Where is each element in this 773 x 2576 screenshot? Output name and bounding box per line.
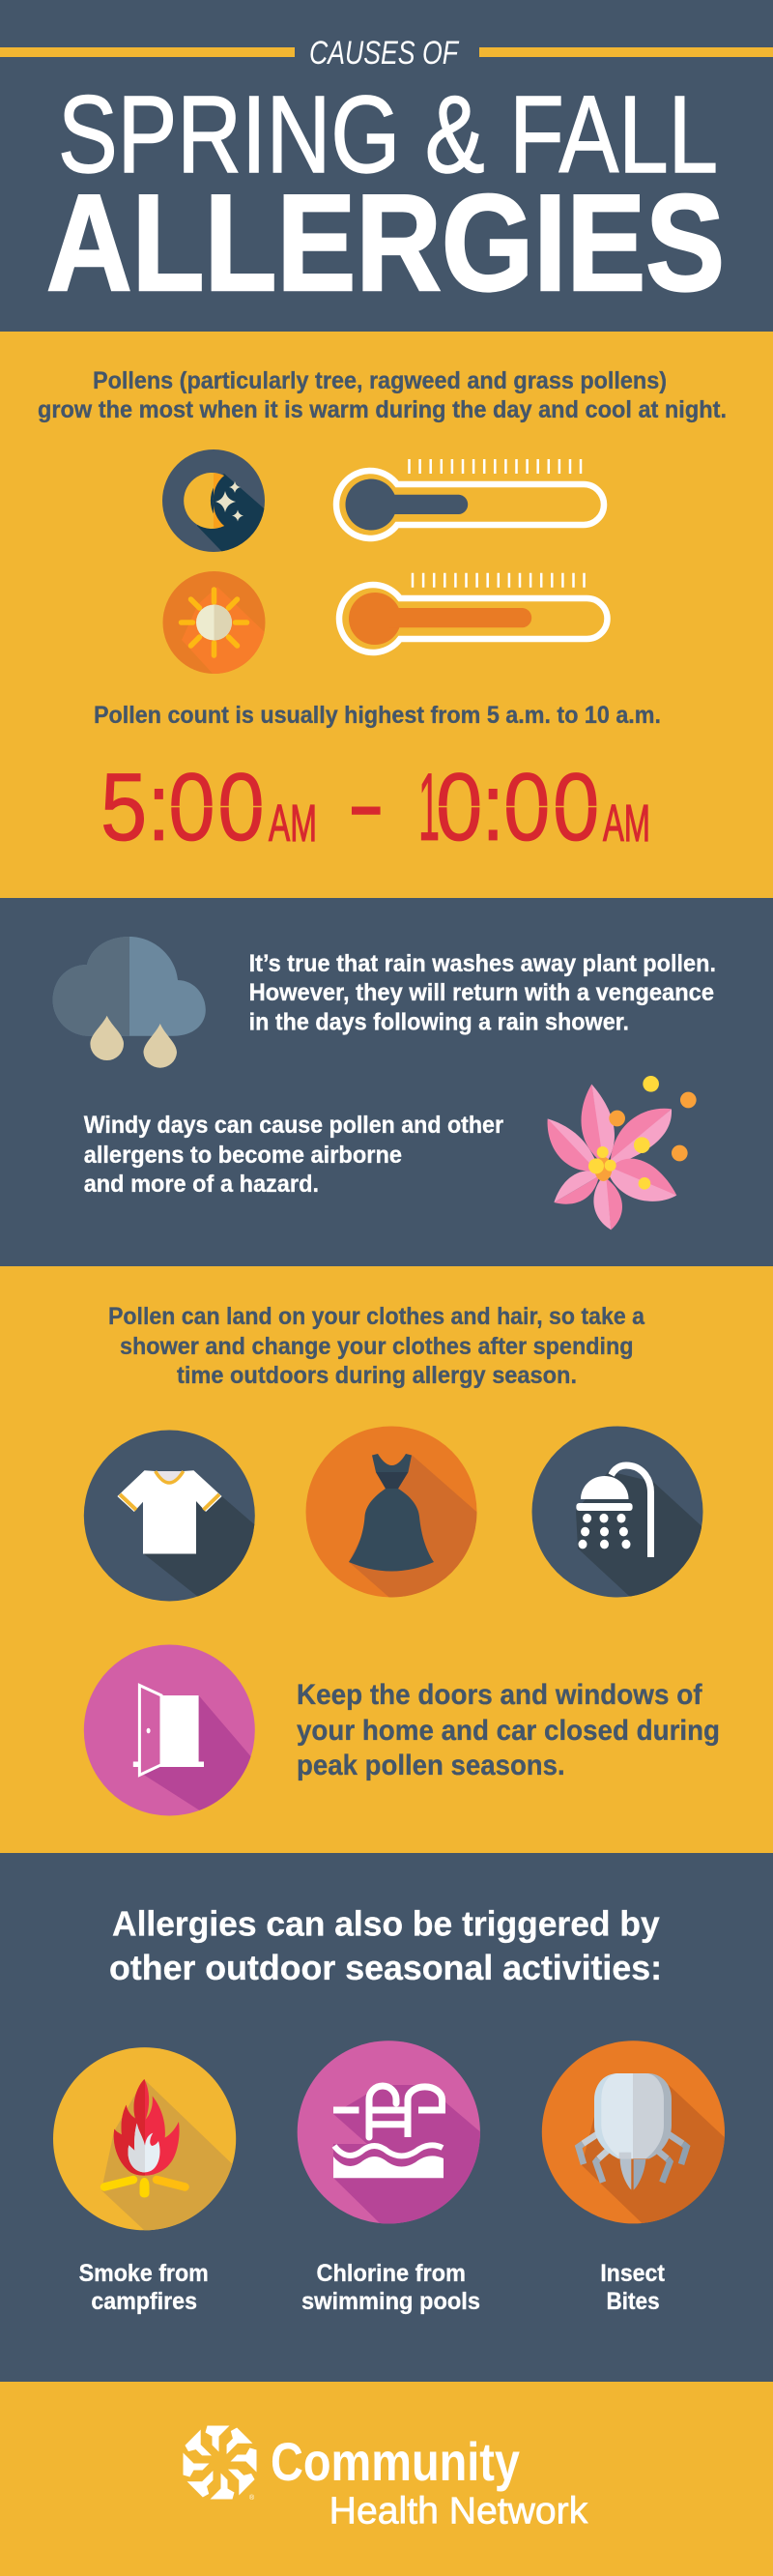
panel: footer xyxy=(0,2382,773,2576)
text: rain: It’s true that rain washes away plant pollen. xyxy=(249,950,716,977)
text: wind: allergens to become airborne xyxy=(84,1142,402,1169)
text: clothes advice: time outdoors during allergy season. xyxy=(177,1362,577,1389)
panel: header xyxy=(0,0,773,332)
logo text: community: Community xyxy=(271,2431,520,2492)
digital clock: 5:00 xyxy=(100,754,265,860)
icon: rain cloud xyxy=(53,937,206,1068)
label: chlorine xyxy=(301,2260,480,2315)
panel: outdoor triggers xyxy=(0,1853,773,2382)
text: pollens intro xyxy=(38,367,727,423)
chart: warm thermometer xyxy=(339,573,607,652)
label: insect bites xyxy=(600,2260,666,2315)
label: insect bites: Bites xyxy=(607,2288,660,2315)
chart: cool thermometer xyxy=(336,459,604,538)
panel: rain and wind xyxy=(0,898,773,1266)
text: pollens intro: Pollens (particularly tree, ragweed and grass pollens) xyxy=(93,367,667,394)
text: wind: Windy days can cause pollen and other xyxy=(84,1112,503,1139)
digital clock: AM xyxy=(603,795,650,853)
digital clock: - xyxy=(347,750,386,857)
text: rain: in the days following a rain shower. xyxy=(249,1009,629,1036)
icon: tick insect xyxy=(542,2041,730,2228)
digital clock xyxy=(100,750,650,860)
icon: swimming pool xyxy=(298,2041,483,2228)
text: wind: and more of a hazard. xyxy=(84,1171,319,1198)
logo text: health network: Health Network xyxy=(329,2491,588,2533)
icon: moon and stars xyxy=(162,449,275,552)
icon: door xyxy=(84,1645,255,1817)
text: keep doors closed xyxy=(297,1679,720,1781)
text: clothes advice: Pollen can land on your clothes and hair, so take a xyxy=(108,1303,645,1330)
text: keep doors closed: your home and car closed during xyxy=(297,1715,720,1747)
label: campfires xyxy=(79,2260,209,2315)
digital clock: AM xyxy=(269,795,317,853)
logo mark xyxy=(184,2426,257,2500)
icon: dress xyxy=(305,1427,483,1605)
text: keep doors closed: Keep the doors and windows of xyxy=(297,1679,702,1711)
text: clothes advice: shower and change your clothes after spending xyxy=(120,1333,634,1360)
icon: sun xyxy=(162,571,269,677)
digital clock: 1 xyxy=(418,754,440,860)
heading: other triggers xyxy=(109,1903,662,1987)
text: keep doors closed: peak pollen seasons. xyxy=(297,1750,565,1781)
label: insect bites: Insect xyxy=(600,2260,666,2287)
label: chlorine: swimming pools xyxy=(301,2288,480,2315)
text: wind xyxy=(84,1112,503,1198)
heading: other triggers: Allergies can also be triggered by xyxy=(112,1903,660,1943)
label: campfires: campfires xyxy=(91,2288,197,2315)
heading: causes of: CAUSES OF xyxy=(309,35,460,72)
panel: pollen timing xyxy=(39,371,726,842)
text: rain: However, they will return with a vengeance xyxy=(249,979,714,1006)
icon: campfire xyxy=(53,2047,242,2235)
text: rain xyxy=(249,950,716,1036)
logo registered mark: ® xyxy=(249,2494,255,2502)
label: chlorine: Chlorine from xyxy=(317,2260,466,2287)
text: clothes advice xyxy=(108,1303,645,1389)
label: campfires: Smoke from xyxy=(79,2260,209,2287)
icon: shirt xyxy=(84,1431,261,1605)
text: pollens intro: grow the most when it is warm during the day and cool at night. xyxy=(38,396,727,423)
panel: clothes and home xyxy=(83,1307,719,1815)
digital clock: 0:00 xyxy=(436,754,599,860)
text: pollen count: Pollen count is usually highest from 5 a.m. to 10 a.m. xyxy=(94,702,661,729)
heading: other triggers: other outdoor seasonal activities: xyxy=(109,1948,662,1987)
icon: flower with pollen xyxy=(548,1076,697,1230)
icon: shower xyxy=(531,1427,710,1605)
